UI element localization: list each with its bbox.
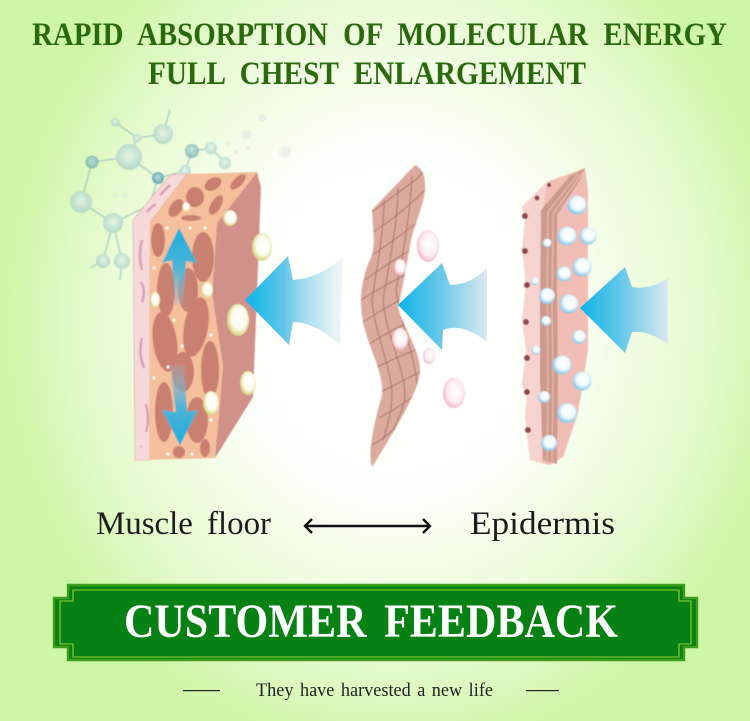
subtitle with side rules: They have harvested a new life xyxy=(256,680,493,701)
middle tissue: sheet xyxy=(361,165,425,467)
pink bubbles xyxy=(392,230,465,408)
middle tissue: grid lines xyxy=(361,168,425,445)
banner text: CUSTOMER FEEDBACK xyxy=(124,595,618,648)
icon: upward blue arrow xyxy=(162,228,197,305)
epidermis: dark pores xyxy=(522,183,551,433)
icon: middle blue arrow xyxy=(398,263,487,350)
title: FULL CHEST ENLARGEMENT xyxy=(148,56,586,92)
icon: left blue arrow xyxy=(245,256,343,345)
muscle block: front face cells xyxy=(149,222,223,460)
muscle block illustration xyxy=(133,172,272,460)
middle tissue illustration xyxy=(361,165,465,467)
epidermis tissue illustration xyxy=(522,168,596,465)
label: muscle floor: Muscle floor xyxy=(96,506,271,542)
icon: double-headed arrow xyxy=(305,519,430,533)
epidermis: pale bumpy edge xyxy=(522,182,547,462)
epidermis: sheet xyxy=(522,168,588,465)
epidermis: central band xyxy=(540,168,585,464)
icon: right blue arrow xyxy=(580,267,668,353)
banner: customer feedback xyxy=(54,585,697,660)
fat bubbles on muscle block xyxy=(150,202,272,415)
muscle block: skin strip xyxy=(133,174,187,460)
muscle block: side face xyxy=(212,172,261,458)
molecule illustration xyxy=(70,110,291,280)
icon: downward blue arrow xyxy=(162,365,198,445)
label: epidermis: Epidermis xyxy=(470,506,615,542)
title xyxy=(32,17,727,92)
muscle block: top face xyxy=(150,172,257,223)
epidermis: blue bubbles xyxy=(531,196,596,451)
